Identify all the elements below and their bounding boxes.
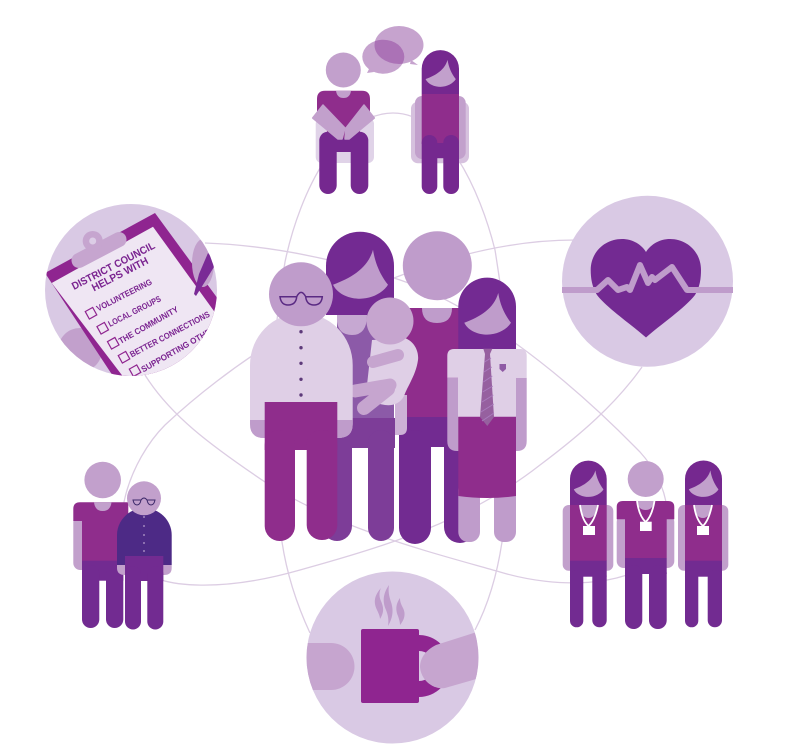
icon: glasses [280, 292, 322, 305]
clipboard text: HELPS WITH [90, 255, 150, 294]
older woman [117, 481, 172, 630]
seated man [313, 52, 374, 194]
clipboard text: VOLUNTEERING [95, 277, 154, 313]
panel: staff group [563, 461, 728, 629]
panel: clipboard circle [45, 204, 217, 376]
network orbit lines [122, 113, 667, 633]
left hand [306, 643, 354, 690]
right hand [420, 631, 480, 688]
standing man [73, 462, 128, 628]
hand with pen [192, 240, 214, 296]
clipboard text [71, 243, 210, 376]
icon: steam [375, 585, 405, 626]
panel: seated conversation [313, 26, 469, 194]
grandfather [250, 262, 353, 541]
clipboard clip [79, 231, 119, 260]
clipboard paper [52, 226, 214, 376]
seated woman [411, 50, 469, 194]
panel: heart circle [562, 196, 733, 367]
clipboard text: DISTRICT COUNCIL [70, 240, 158, 293]
baby [355, 298, 418, 408]
schoolgirl [447, 278, 527, 542]
staff man centre [617, 461, 674, 629]
hand behind clipboard [60, 328, 100, 368]
panel: mug circle [300, 572, 480, 744]
heartbeat line [562, 265, 733, 290]
panel: older couple [73, 462, 172, 630]
clipboard text: THE COMMUNITY [117, 304, 180, 346]
panel: central family [250, 231, 527, 544]
staff woman left [563, 461, 613, 627]
speech bubbles [362, 26, 424, 74]
clipboard board [46, 213, 217, 376]
mother [322, 232, 407, 541]
staff woman right [678, 461, 728, 627]
clipboard text: LOCAL GROUPS [106, 293, 163, 329]
icon: striped tie [480, 349, 494, 426]
father [399, 231, 476, 544]
icon: shirt badge [500, 364, 506, 372]
icon: heart [591, 239, 701, 338]
clipboard text: SUPPORTING OTHERS [139, 321, 223, 374]
clipboard text: BETTER CONNECTIONS [128, 309, 212, 359]
icon: mug [361, 629, 419, 703]
icon: mug handle [419, 635, 441, 697]
